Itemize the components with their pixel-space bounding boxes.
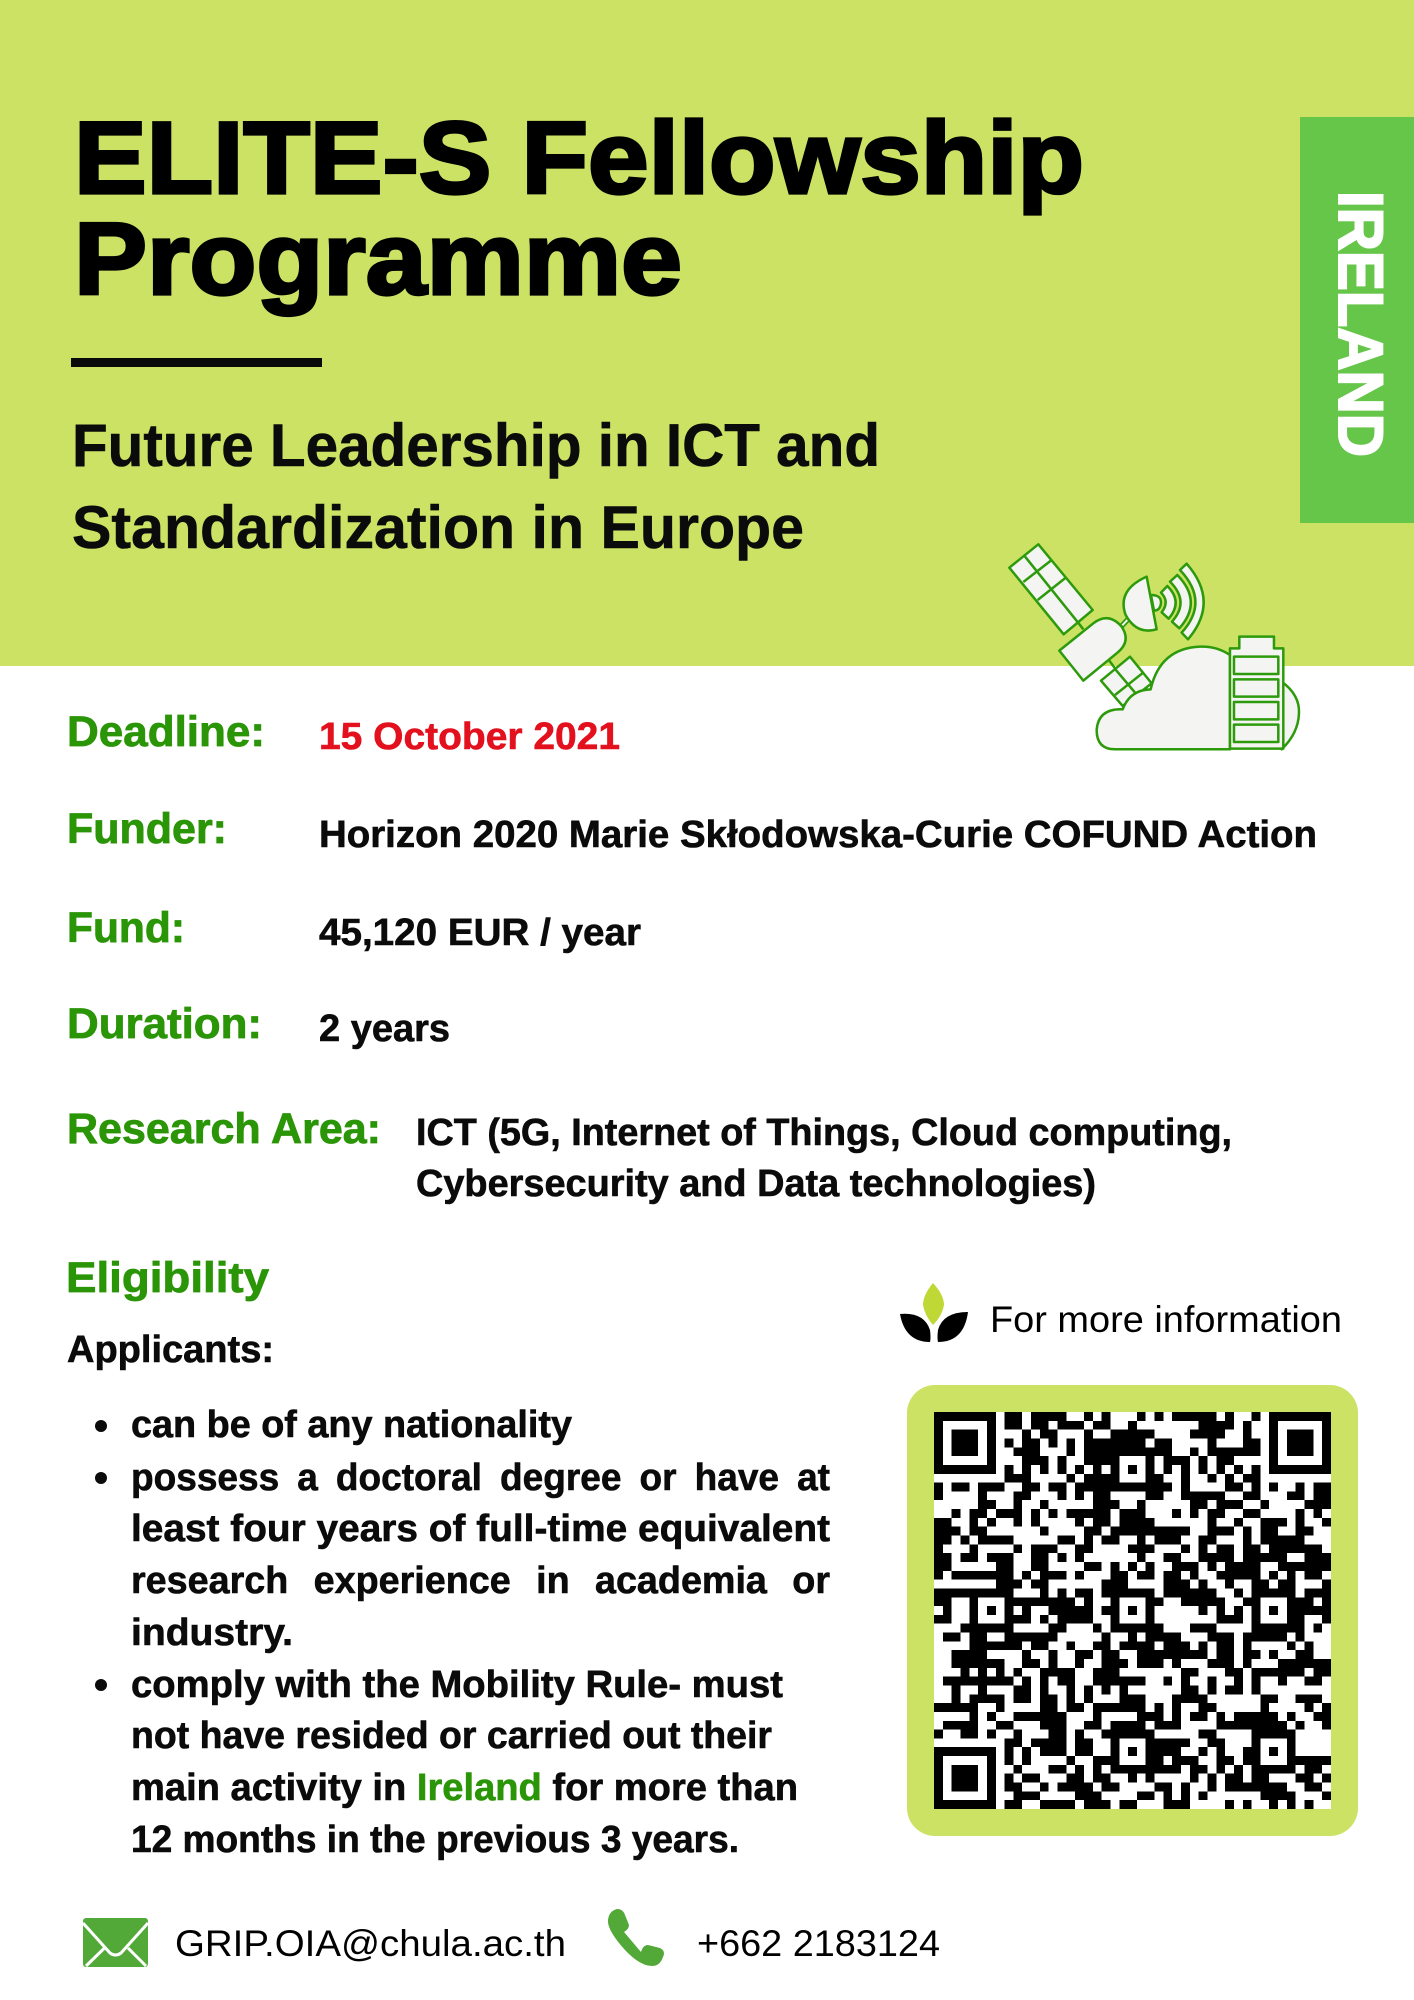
subtitle: Future Leadership in ICT and: [72, 412, 880, 479]
title: Programme: [74, 202, 682, 316]
country tab: Ireland: [1300, 117, 1414, 523]
research area row: Research Area:: [67, 1105, 381, 1153]
eligibility bullet list: can be of any nationality: [131, 1404, 572, 1446]
icon: satellite, cloud and battery: [1009, 544, 1299, 749]
subtitle: [72, 412, 880, 561]
eligibility bullet list: least four years of full-time equivalent: [131, 1508, 830, 1550]
icon: phone: [608, 1909, 664, 1966]
eligibility bullet list: main activity in Ireland for more than: [131, 1767, 798, 1809]
applicants label: Applicants:: [67, 1329, 274, 1371]
eligibility bullet list: research experience in academia or: [131, 1560, 830, 1602]
duration row: [67, 1000, 450, 1050]
eligibility bullet list: comply with the Mobility Rule- must: [131, 1664, 783, 1706]
eligibility bullet list: not have resided or carried out their: [131, 1715, 772, 1757]
QR card: [907, 1385, 1358, 1836]
more information label: For more information: [990, 1299, 1342, 1340]
title: ELITE-S Fellowship: [74, 101, 1084, 215]
icon: leaves: [900, 1283, 968, 1342]
deadline row: Deadline:: [67, 708, 265, 756]
eligibility bullet list: possess a doctoral degree or have at: [131, 1457, 830, 1499]
fund row: 45,120 EUR / year: [319, 912, 641, 954]
icon: envelope: [83, 1918, 148, 1967]
fund row: [67, 904, 641, 954]
subtitle: Standardization in Europe: [72, 494, 804, 561]
country tab: Ireland: IRELAND: [1325, 191, 1395, 457]
duration row: Duration:: [67, 1000, 262, 1048]
header panel: [0, 0, 1414, 666]
funder row: [67, 805, 1317, 856]
QR code: [934, 1412, 1331, 1809]
duration row: 2 years: [319, 1008, 450, 1050]
research area row: [67, 1105, 1232, 1205]
phone number: +662 2183124: [697, 1923, 940, 1964]
title rule: [71, 358, 322, 367]
funder row: Funder:: [67, 805, 227, 853]
deadline row: [67, 708, 620, 758]
funder row: Horizon 2020 Marie Skłodowska-Curie COFUND Action: [319, 814, 1317, 856]
deadline row: 15 October 2021: [319, 716, 620, 758]
research area row: Cybersecurity and Data technologies): [416, 1163, 1096, 1205]
eligibility bullet list: 12 months in the previous 3 years.: [131, 1819, 739, 1861]
title: [74, 101, 1084, 316]
eligibility bullet list: industry.: [131, 1612, 293, 1654]
eligibility heading: Eligibility: [66, 1254, 269, 1302]
email address: GRIP.OIA@chula.ac.th: [175, 1923, 566, 1964]
fund row: Fund:: [67, 904, 185, 952]
research area row: ICT (5G, Internet of Things, Cloud computing,: [416, 1112, 1232, 1154]
eligibility bullet list: [95, 1404, 830, 1861]
